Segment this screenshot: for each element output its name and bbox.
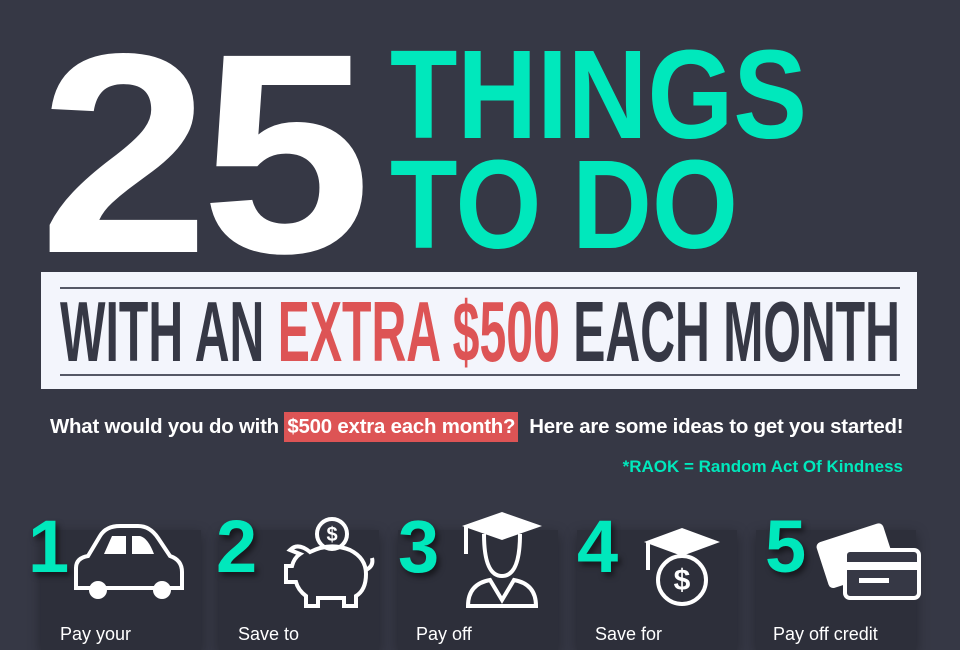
- icon: graduation coin: [644, 528, 720, 606]
- number 1: 1: [28, 505, 69, 588]
- card 1: [41, 530, 201, 650]
- card 2: [219, 530, 379, 650]
- number 4: 4: [577, 505, 618, 588]
- icon: graduate: [462, 512, 542, 608]
- card text 1: Pay your: [60, 624, 131, 644]
- subtitle: What would you do with $500 extra each month? Here are some ideas to get you started!: [50, 416, 903, 438]
- icon: car: [74, 524, 184, 599]
- card text 2: Save to: [238, 624, 299, 644]
- title: TO DO: TO DO: [390, 134, 738, 275]
- card 5: [756, 530, 916, 650]
- title: THINGS: THINGS: [390, 24, 807, 165]
- footnote: RAOK: *RAOK = Random Act Of Kindness: [623, 457, 903, 476]
- icon: piggy bank: $: [326, 524, 338, 546]
- number 2: 2: [216, 505, 257, 588]
- banner heading: WITH AN EXTRA $500 EACH MONTH: [60, 285, 900, 380]
- number 3: 3: [398, 505, 439, 588]
- icon: graduation coin: $: [674, 564, 691, 597]
- title: 25: 25: [39, 0, 363, 313]
- banner: [41, 272, 917, 389]
- card text 5: Pay off credit: [773, 624, 878, 644]
- card text 4: Save for: [595, 624, 662, 644]
- card 3: [398, 530, 558, 650]
- card text 3: Pay off: [416, 624, 472, 644]
- number 5: 5: [765, 505, 806, 588]
- icon: piggy bank: [284, 517, 374, 608]
- icon: credit cards: [816, 523, 921, 600]
- card 4: [577, 530, 737, 650]
